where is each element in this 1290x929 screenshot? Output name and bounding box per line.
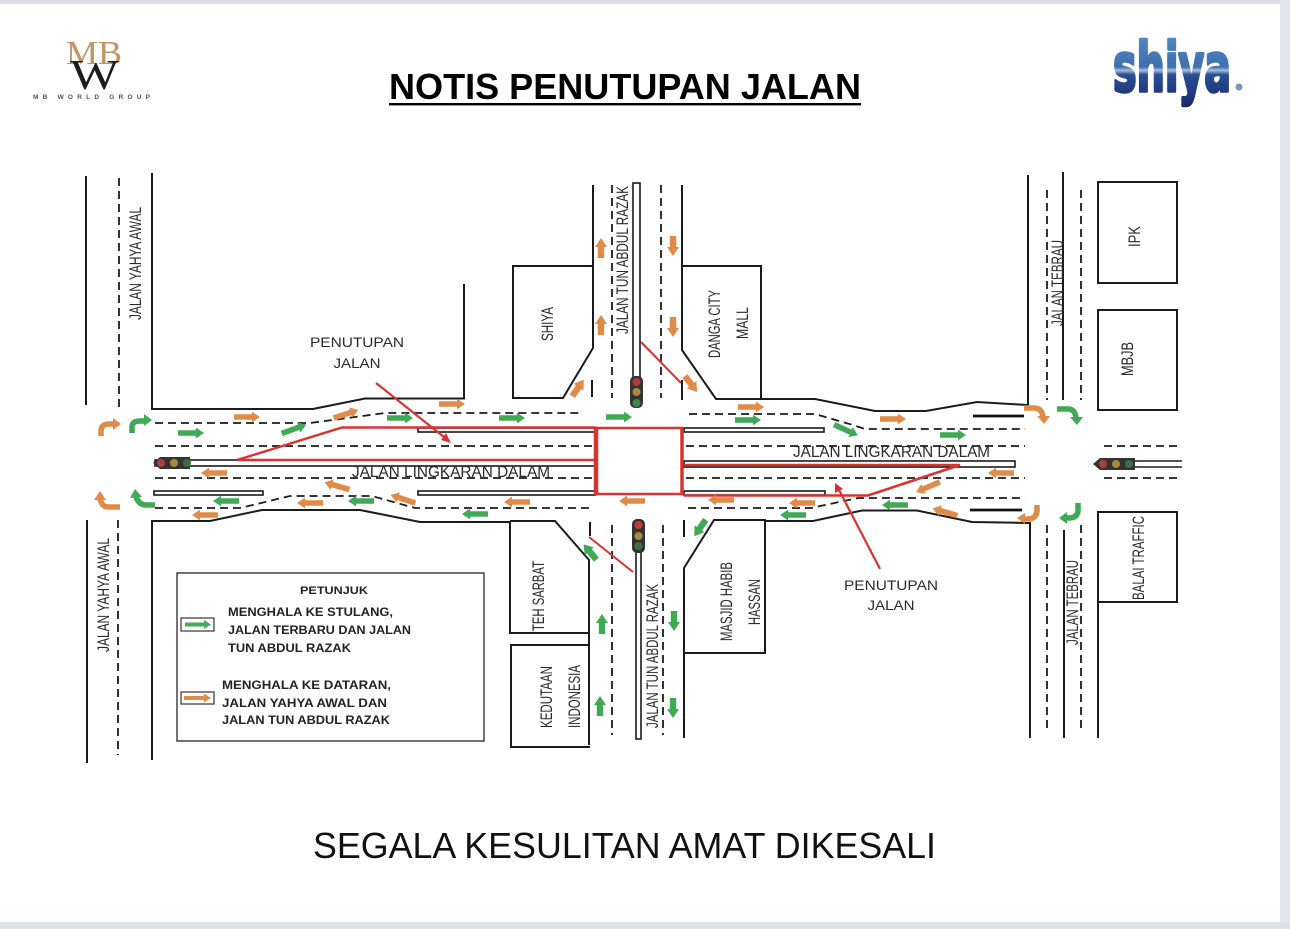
road and building labels: TEH SARBAT bbox=[529, 561, 548, 631]
logo: MB World Group: MB WORLD GROUP bbox=[33, 94, 151, 101]
road and building labels: HASSAN bbox=[745, 579, 764, 625]
traffic light: east bbox=[1093, 458, 1135, 470]
legend item: green route: JALAN TERBARU DAN JALAN bbox=[228, 625, 411, 637]
road and building labels: DANGA CITY bbox=[705, 290, 724, 358]
road and building labels: SHIYA bbox=[538, 307, 557, 341]
road and building labels: JALAN YAHYA AWAL bbox=[126, 207, 145, 320]
legend item: orange route: JALAN YAHYA AWAL DAN bbox=[222, 698, 387, 710]
road and building labels: JALAN LINGKARAN DALAM bbox=[793, 444, 990, 461]
callout: road closure, west: PENUTUPAN bbox=[310, 334, 404, 350]
legend item: green route: TUN ABDUL RAZAK bbox=[228, 643, 352, 655]
legend panel bbox=[177, 573, 484, 741]
legend item: orange route: MENGHALA KE DATARAN, bbox=[222, 680, 391, 692]
road and building labels: JALAN TUN ABDUL RAZAK bbox=[613, 186, 632, 334]
road and building labels: JALAN TEBRAU bbox=[1048, 240, 1067, 326]
logo: MB World Group: W bbox=[70, 53, 119, 99]
traffic light: south bbox=[632, 519, 645, 553]
road and building labels bbox=[94, 186, 1148, 728]
legend item: orange route: JALAN TUN ABDUL RAZAK bbox=[222, 715, 391, 727]
road and building labels: IPK bbox=[1125, 225, 1144, 247]
green route arrows bbox=[178, 412, 966, 718]
road and building labels: JALAN LINGKARAN DALAM bbox=[352, 464, 550, 481]
callout: road closure, east: JALAN bbox=[868, 597, 914, 613]
legend item: green route bbox=[181, 607, 411, 655]
road and building labels: JALAN TEBRAU bbox=[1063, 560, 1082, 645]
road and building labels: MASJID HABIB bbox=[717, 562, 736, 641]
road outlines and buildings bbox=[86, 172, 1182, 763]
traffic light: west bbox=[153, 457, 191, 469]
road and building labels: MBJB bbox=[1118, 342, 1137, 376]
road and building labels: JALAN YAHYA AWAL bbox=[94, 538, 113, 652]
road and building labels: BALAI TRAFFIC bbox=[1129, 516, 1148, 600]
road map bbox=[86, 172, 1182, 763]
turn arrows at junctions bbox=[100, 408, 1078, 519]
callout: road closure, west bbox=[310, 334, 404, 371]
traffic light: north bbox=[630, 376, 643, 408]
road and building labels: MALL bbox=[733, 307, 752, 339]
closure markings bbox=[237, 342, 960, 572]
callout: road closure, east: PENUTUPAN bbox=[844, 577, 938, 593]
lane dashes bbox=[118, 178, 1182, 755]
title: NOTIS PENUTUPAN JALAN bbox=[389, 66, 861, 107]
legend item: green route: MENGHALA KE STULANG, bbox=[228, 607, 393, 619]
medians and barriers bbox=[155, 460, 595, 466]
callout: road closure, west: JALAN bbox=[334, 355, 380, 371]
legend item: orange route bbox=[181, 680, 391, 727]
logo: MB World Group: MB bbox=[66, 35, 122, 72]
road and building labels: JALAN TUN ABDUL RAZAK bbox=[643, 584, 662, 728]
logo: MB World Group bbox=[33, 35, 151, 101]
legend heading: PETUNJUK bbox=[300, 585, 368, 597]
orange route arrows bbox=[192, 236, 1014, 521]
footer message: SEGALA KESULITAN AMAT DIKESALI bbox=[313, 825, 936, 866]
road and building labels: INDONESIA bbox=[565, 665, 584, 728]
thick stop bars bbox=[970, 416, 1024, 510]
callout: road closure, east bbox=[844, 577, 938, 613]
turn arrowheads bbox=[94, 414, 1083, 524]
road and building labels: KEDUTAAN bbox=[537, 666, 556, 728]
closure pointer arrowheads bbox=[441, 433, 843, 493]
